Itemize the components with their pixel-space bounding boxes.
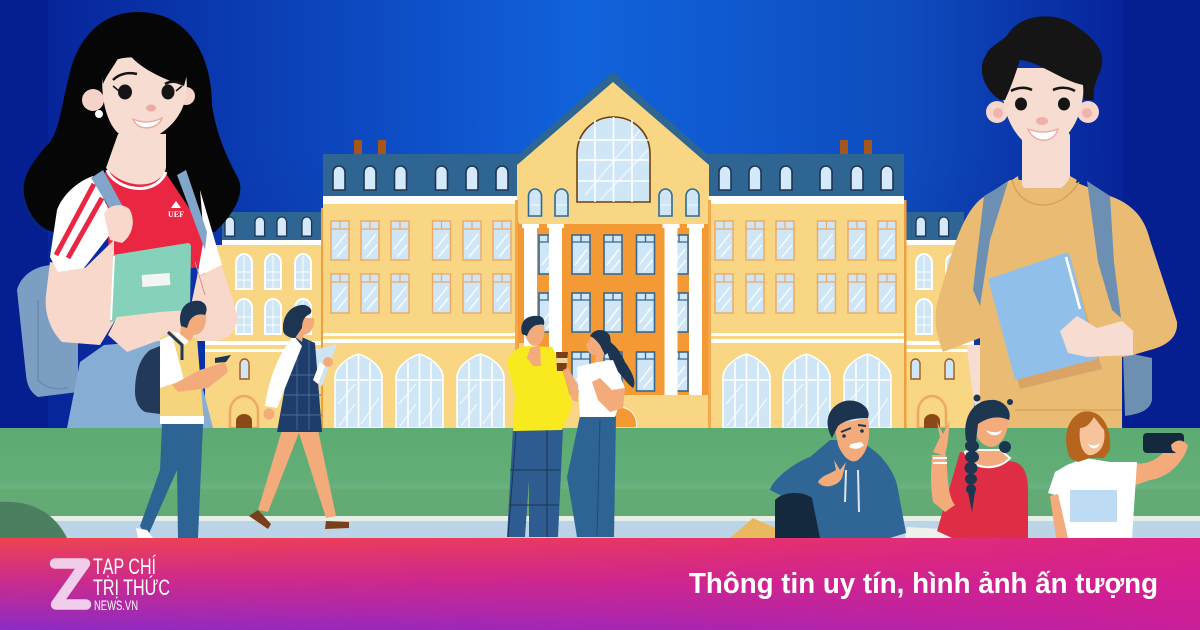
background: blue sky [0, 0, 1200, 430]
braid [964, 440, 979, 512]
logo on shirt: UEF [168, 210, 184, 219]
green book [110, 243, 191, 322]
orange portico [515, 200, 711, 428]
eyes, brows [118, 84, 132, 100]
backpack [135, 346, 160, 414]
left wing [323, 154, 519, 428]
fringe [98, 18, 192, 86]
left side wing of building [205, 208, 324, 428]
blouse arm [265, 336, 302, 408]
nose and mouth [146, 104, 156, 112]
central gable [517, 72, 709, 226]
face [82, 89, 104, 111]
bag [730, 518, 792, 538]
white shirt [1048, 458, 1137, 538]
figure: sitting boy in hoodie [730, 400, 906, 538]
main building [323, 72, 904, 428]
sweater [935, 180, 1177, 428]
lawn and pavement [0, 428, 1200, 540]
logo mark Z [55, 564, 86, 604]
logo on shirt [168, 201, 184, 219]
right sleeve [197, 190, 222, 277]
legs [258, 430, 300, 512]
tagline: Thông tin uy tín, hình ảnh ấn tượng [689, 568, 1158, 600]
coffee cup [556, 352, 568, 371]
chimneys [354, 140, 872, 154]
figure: selfie girl [1048, 411, 1188, 538]
ears, face [986, 101, 1008, 123]
figure: walking girl in plaid dress [249, 305, 349, 529]
long black hair [23, 12, 240, 232]
red shirt [937, 452, 1028, 538]
shoe [136, 528, 153, 538]
man head [523, 325, 545, 346]
woman pants [567, 416, 616, 537]
paper [313, 344, 337, 386]
shirt and vest [160, 332, 204, 424]
strap [168, 332, 182, 360]
straps [91, 170, 122, 212]
nose and mouth [1036, 117, 1048, 125]
arm [1133, 440, 1188, 486]
body/shirt [105, 172, 205, 282]
arm and phone [172, 362, 228, 392]
left arm [46, 240, 114, 345]
hair [982, 16, 1102, 100]
overalls [67, 338, 213, 428]
right side wing of building [904, 200, 974, 428]
backpack [17, 265, 78, 397]
lower arm [967, 345, 982, 410]
open book [905, 527, 960, 538]
head [294, 318, 314, 342]
logo wordmark: TRỊ THỨC [93, 575, 170, 600]
logo wordmark [93, 554, 170, 613]
head [180, 312, 206, 342]
figure: large student girl [17, 12, 240, 428]
book [993, 263, 1102, 389]
figure: couple talking [507, 316, 634, 537]
hand V sign [818, 460, 846, 486]
man sweater [507, 346, 572, 431]
bottom brand band [0, 538, 1200, 630]
phone [1143, 433, 1184, 453]
dark leg [775, 493, 820, 538]
shoes [249, 510, 271, 529]
figure: seated girl with braid [905, 394, 1028, 538]
straps [973, 182, 1008, 306]
figure: walking boy with phone [135, 301, 231, 538]
eyes and brows [1015, 98, 1027, 110]
right arm and hand [108, 266, 238, 352]
hand [1060, 316, 1133, 357]
neck [106, 134, 166, 184]
woman ponytail [603, 340, 634, 388]
dress [277, 334, 322, 432]
woman head [586, 330, 606, 362]
hair and head [1066, 411, 1110, 462]
right wing [707, 154, 904, 428]
backpack lower [1123, 352, 1152, 416]
pants [140, 424, 203, 538]
man plaid pants [507, 428, 563, 537]
hoodie [770, 440, 906, 538]
logo: Z Tạp chí Trí Thức [55, 554, 170, 613]
neck and collar [965, 450, 1010, 467]
head [974, 410, 1008, 447]
logo wordmark: TẠP CHÍ [93, 554, 157, 579]
woman shirt [577, 360, 625, 417]
woman arm [563, 368, 578, 402]
hand on strap [104, 205, 133, 243]
sleeve with stripes [50, 176, 112, 272]
figure: large student boy [935, 16, 1177, 428]
lower arm [1050, 494, 1068, 538]
logo wordmark: NEWS.VN [94, 597, 138, 613]
head [834, 418, 869, 461]
arm and hand [931, 455, 955, 512]
